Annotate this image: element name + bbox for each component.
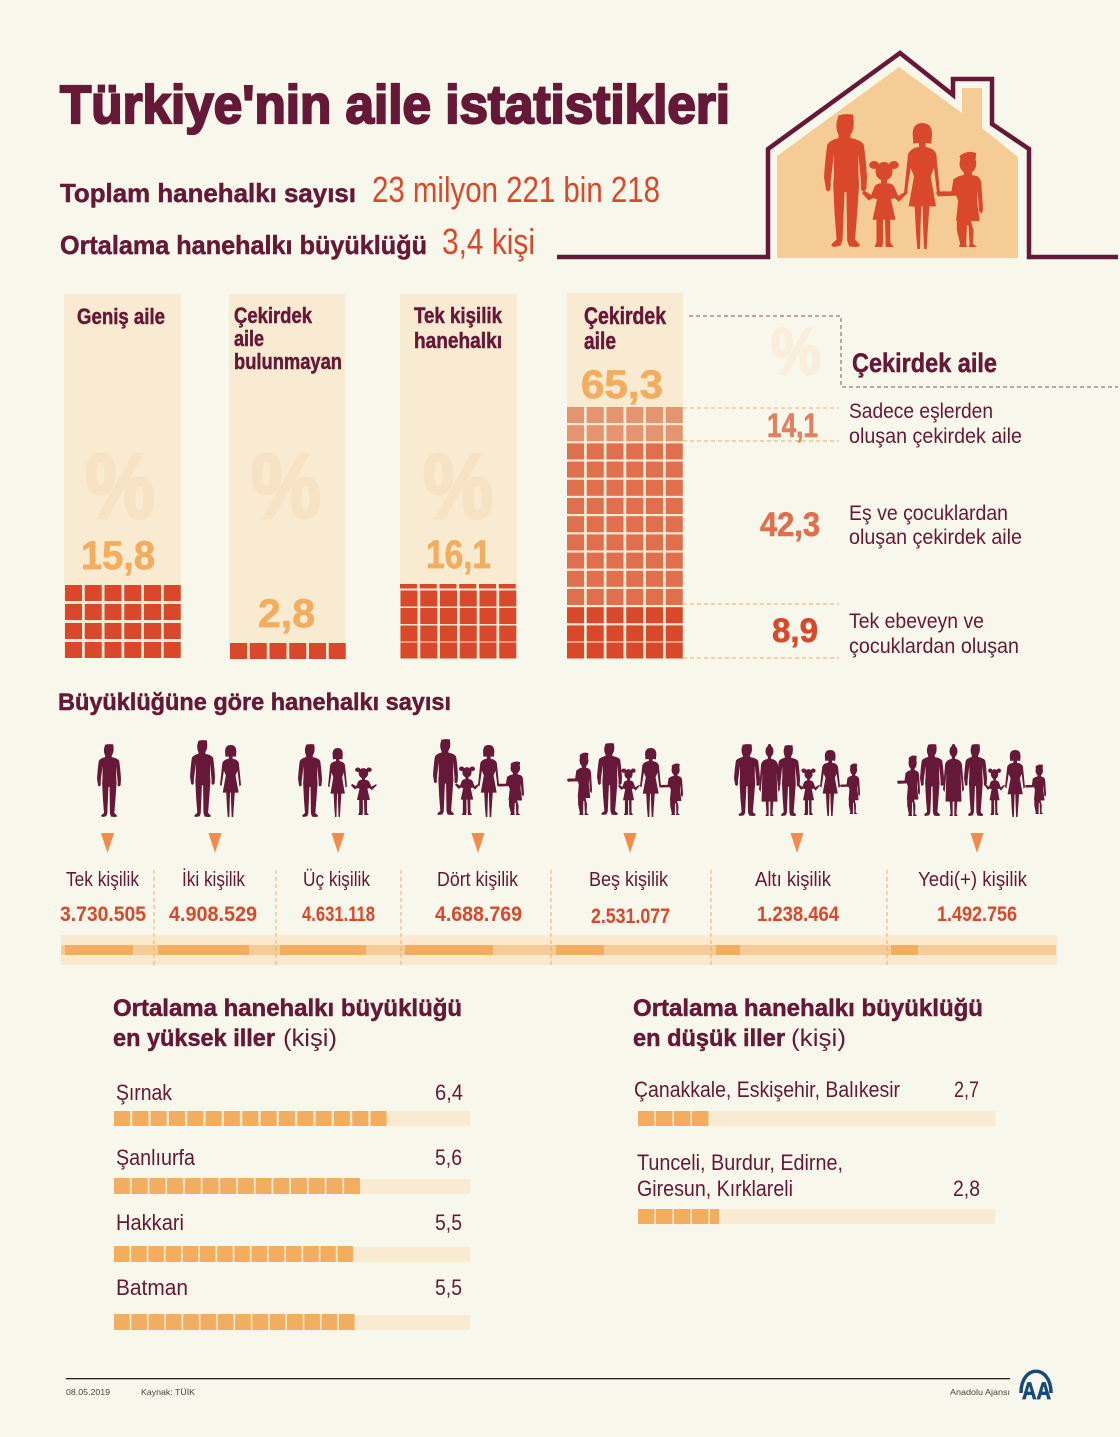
row: Şırnak: Şırnak (116, 1080, 173, 1105)
stat: average household size (60, 221, 535, 262)
panel: no nuclear family: aile (234, 326, 264, 351)
panel: single person household: % (423, 436, 493, 538)
size labels: Beş kişilik (589, 869, 669, 891)
breakdown: single parent (772, 610, 1019, 658)
household counts: 4.908.529 (169, 903, 257, 926)
percent symbol: % (771, 314, 821, 388)
icon: three people (298, 744, 377, 817)
panel: single person household: Tek kişilik (414, 303, 503, 328)
house illustration with family (557, 53, 1118, 258)
breakdown: couples only (767, 400, 1022, 448)
icon: four people (433, 739, 524, 817)
icon: agency logo (1021, 1371, 1051, 1405)
breakdown: couples and children: oluşan çekirdek aile (849, 526, 1022, 549)
household counts: 2.531.077 (591, 905, 670, 928)
row: Hakkari: Hakkari (116, 1210, 184, 1235)
title: Türkiye'nin aile istatistikleri (60, 75, 730, 135)
stat: average household size: 3,4 kişi (442, 221, 535, 262)
panel: nuclear family: 65,3 (581, 363, 663, 407)
stat: total households (60, 169, 660, 210)
row: Tunceli, Burdur, Edirne, Giresun, Kırklareli (637, 1150, 995, 1224)
icon: six people (734, 744, 860, 816)
heading: nuclear family: Çekirdek aile (852, 348, 997, 378)
breakdown: single parent: 8,9 (772, 612, 818, 650)
row: Şanlıurfa (114, 1145, 470, 1194)
icon: agency logo: AA (1022, 1378, 1051, 1405)
breakdown: single parent: çocuklardan oluşan (849, 635, 1019, 658)
row: Çanakkale, Eskişehir, Balıkesir: 2,7 (954, 1077, 979, 1102)
breakdown: couples only: oluşan çekirdek aile (849, 425, 1022, 448)
panel: no nuclear family: bulunmayan (234, 349, 342, 374)
panel: no nuclear family (229, 294, 346, 659)
size labels: Altı kişilik (755, 869, 832, 891)
row: Batman (114, 1275, 470, 1330)
panel: single person household (400, 294, 517, 658)
row: Tunceli, Burdur, Edirne, Giresun, Kırklareli: Tunceli, Burdur, Edirne, (637, 1150, 843, 1175)
panel: nuclear family: Çekirdek (584, 303, 667, 330)
household counts: 1.238.464 (757, 903, 839, 926)
panel: no nuclear family: Çekirdek (234, 303, 313, 328)
row: Tunceli, Burdur, Edirne, Giresun, Kırklareli: 2,8 (953, 1176, 980, 1201)
size labels: Yedi(+) kişilik (918, 869, 1028, 891)
row: Çanakkale, Eskişehir, Balıkesir (634, 1077, 995, 1126)
stat: total households: Toplam hanehalkı sayısı (60, 178, 356, 208)
icon: one person (97, 744, 121, 817)
row: Batman: 5,5 (435, 1275, 462, 1300)
footer rule (66, 1378, 1010, 1379)
panel: nuclear family: aile (584, 328, 616, 355)
household counts: 4.631.118 (302, 903, 375, 926)
size labels: Tek kişilik (66, 869, 140, 891)
heading: lowest provinces (633, 995, 983, 1052)
panel: nuclear family (567, 293, 683, 658)
panel: extended family: Geniş aile (77, 304, 165, 329)
heading: households by size: Büyüklüğüne göre hanehalkı sayısı (58, 689, 451, 716)
panel: extended family: 15,8 (81, 534, 155, 578)
size labels: Dört kişilik (437, 869, 519, 891)
icon: seven people (897, 744, 1046, 817)
breakdown: single parent: Tek ebeveyn ve (849, 610, 984, 633)
icon: five people (567, 743, 683, 817)
pointer arrows (101, 833, 984, 853)
breakdown: couples and children: 42,3 (760, 506, 820, 544)
date: 08.05.2019 (66, 1388, 111, 1397)
size labels (66, 868, 1028, 891)
panel: single person household: 16,1 (426, 533, 491, 577)
row: Çanakkale, Eskişehir, Balıkesir: Çanakkale, Eskişehir, Balıkesir (634, 1077, 900, 1102)
stat: average household size: Ortalama hanehalkı büyüklüğü (60, 230, 427, 260)
heading: highest provinces: en yüksek iller (113, 1025, 275, 1052)
row: Şanlıurfa: Şanlıurfa (116, 1145, 196, 1170)
panel: extended family: % (85, 436, 155, 538)
row: Şırnak: 6,4 (435, 1080, 463, 1105)
row: Batman: Batman (116, 1275, 188, 1300)
panel: extended family (64, 294, 181, 658)
row: Hakkari (114, 1210, 470, 1262)
size labels: Üç kişilik (303, 869, 371, 891)
household counts: 3.730.505 (60, 903, 146, 926)
row: Tunceli, Burdur, Edirne, Giresun, Kırklareli: Giresun, Kırklareli (637, 1176, 793, 1201)
heading: highest provinces (113, 995, 462, 1052)
agency name: Anadolu Ajansı (950, 1388, 1010, 1397)
heading: highest provinces: Ortalama hanehalkı büyüklüğü (113, 995, 462, 1022)
row: Hakkari: 5,5 (435, 1210, 462, 1235)
stat: total households: 23 milyon 221 bin 218 (372, 169, 660, 210)
heading: lowest provinces: (kişi) (791, 1025, 846, 1052)
breakdown: couples only: 14,1 (767, 407, 818, 445)
panel: no nuclear family: 2,8 (258, 592, 315, 636)
heading: lowest provinces: Ortalama hanehalkı büyüklüğü (633, 995, 983, 1022)
breakdown: couples and children (760, 502, 1022, 549)
household counts (60, 903, 1017, 928)
panel: single person household: hanehalkı (414, 328, 502, 353)
icon: two people (190, 740, 241, 817)
household size bar (61, 870, 1057, 965)
source: Kaynak: TÜİK (141, 1388, 196, 1397)
row: Şırnak (114, 1080, 470, 1126)
row: Şanlıurfa: 5,6 (435, 1145, 462, 1170)
household counts: 4.688.769 (435, 903, 522, 926)
breakdown: couples and children: Eş ve çocuklardan (849, 502, 1008, 525)
breakdown: couples only: Sadece eşlerden (849, 400, 993, 423)
household counts: 1.492.756 (937, 903, 1017, 926)
heading: highest provinces: (kişi) (283, 1025, 337, 1052)
heading: lowest provinces: en düşük iller (633, 1025, 785, 1052)
panel: no nuclear family: % (251, 436, 321, 538)
size labels: İki kişilik (182, 868, 246, 891)
